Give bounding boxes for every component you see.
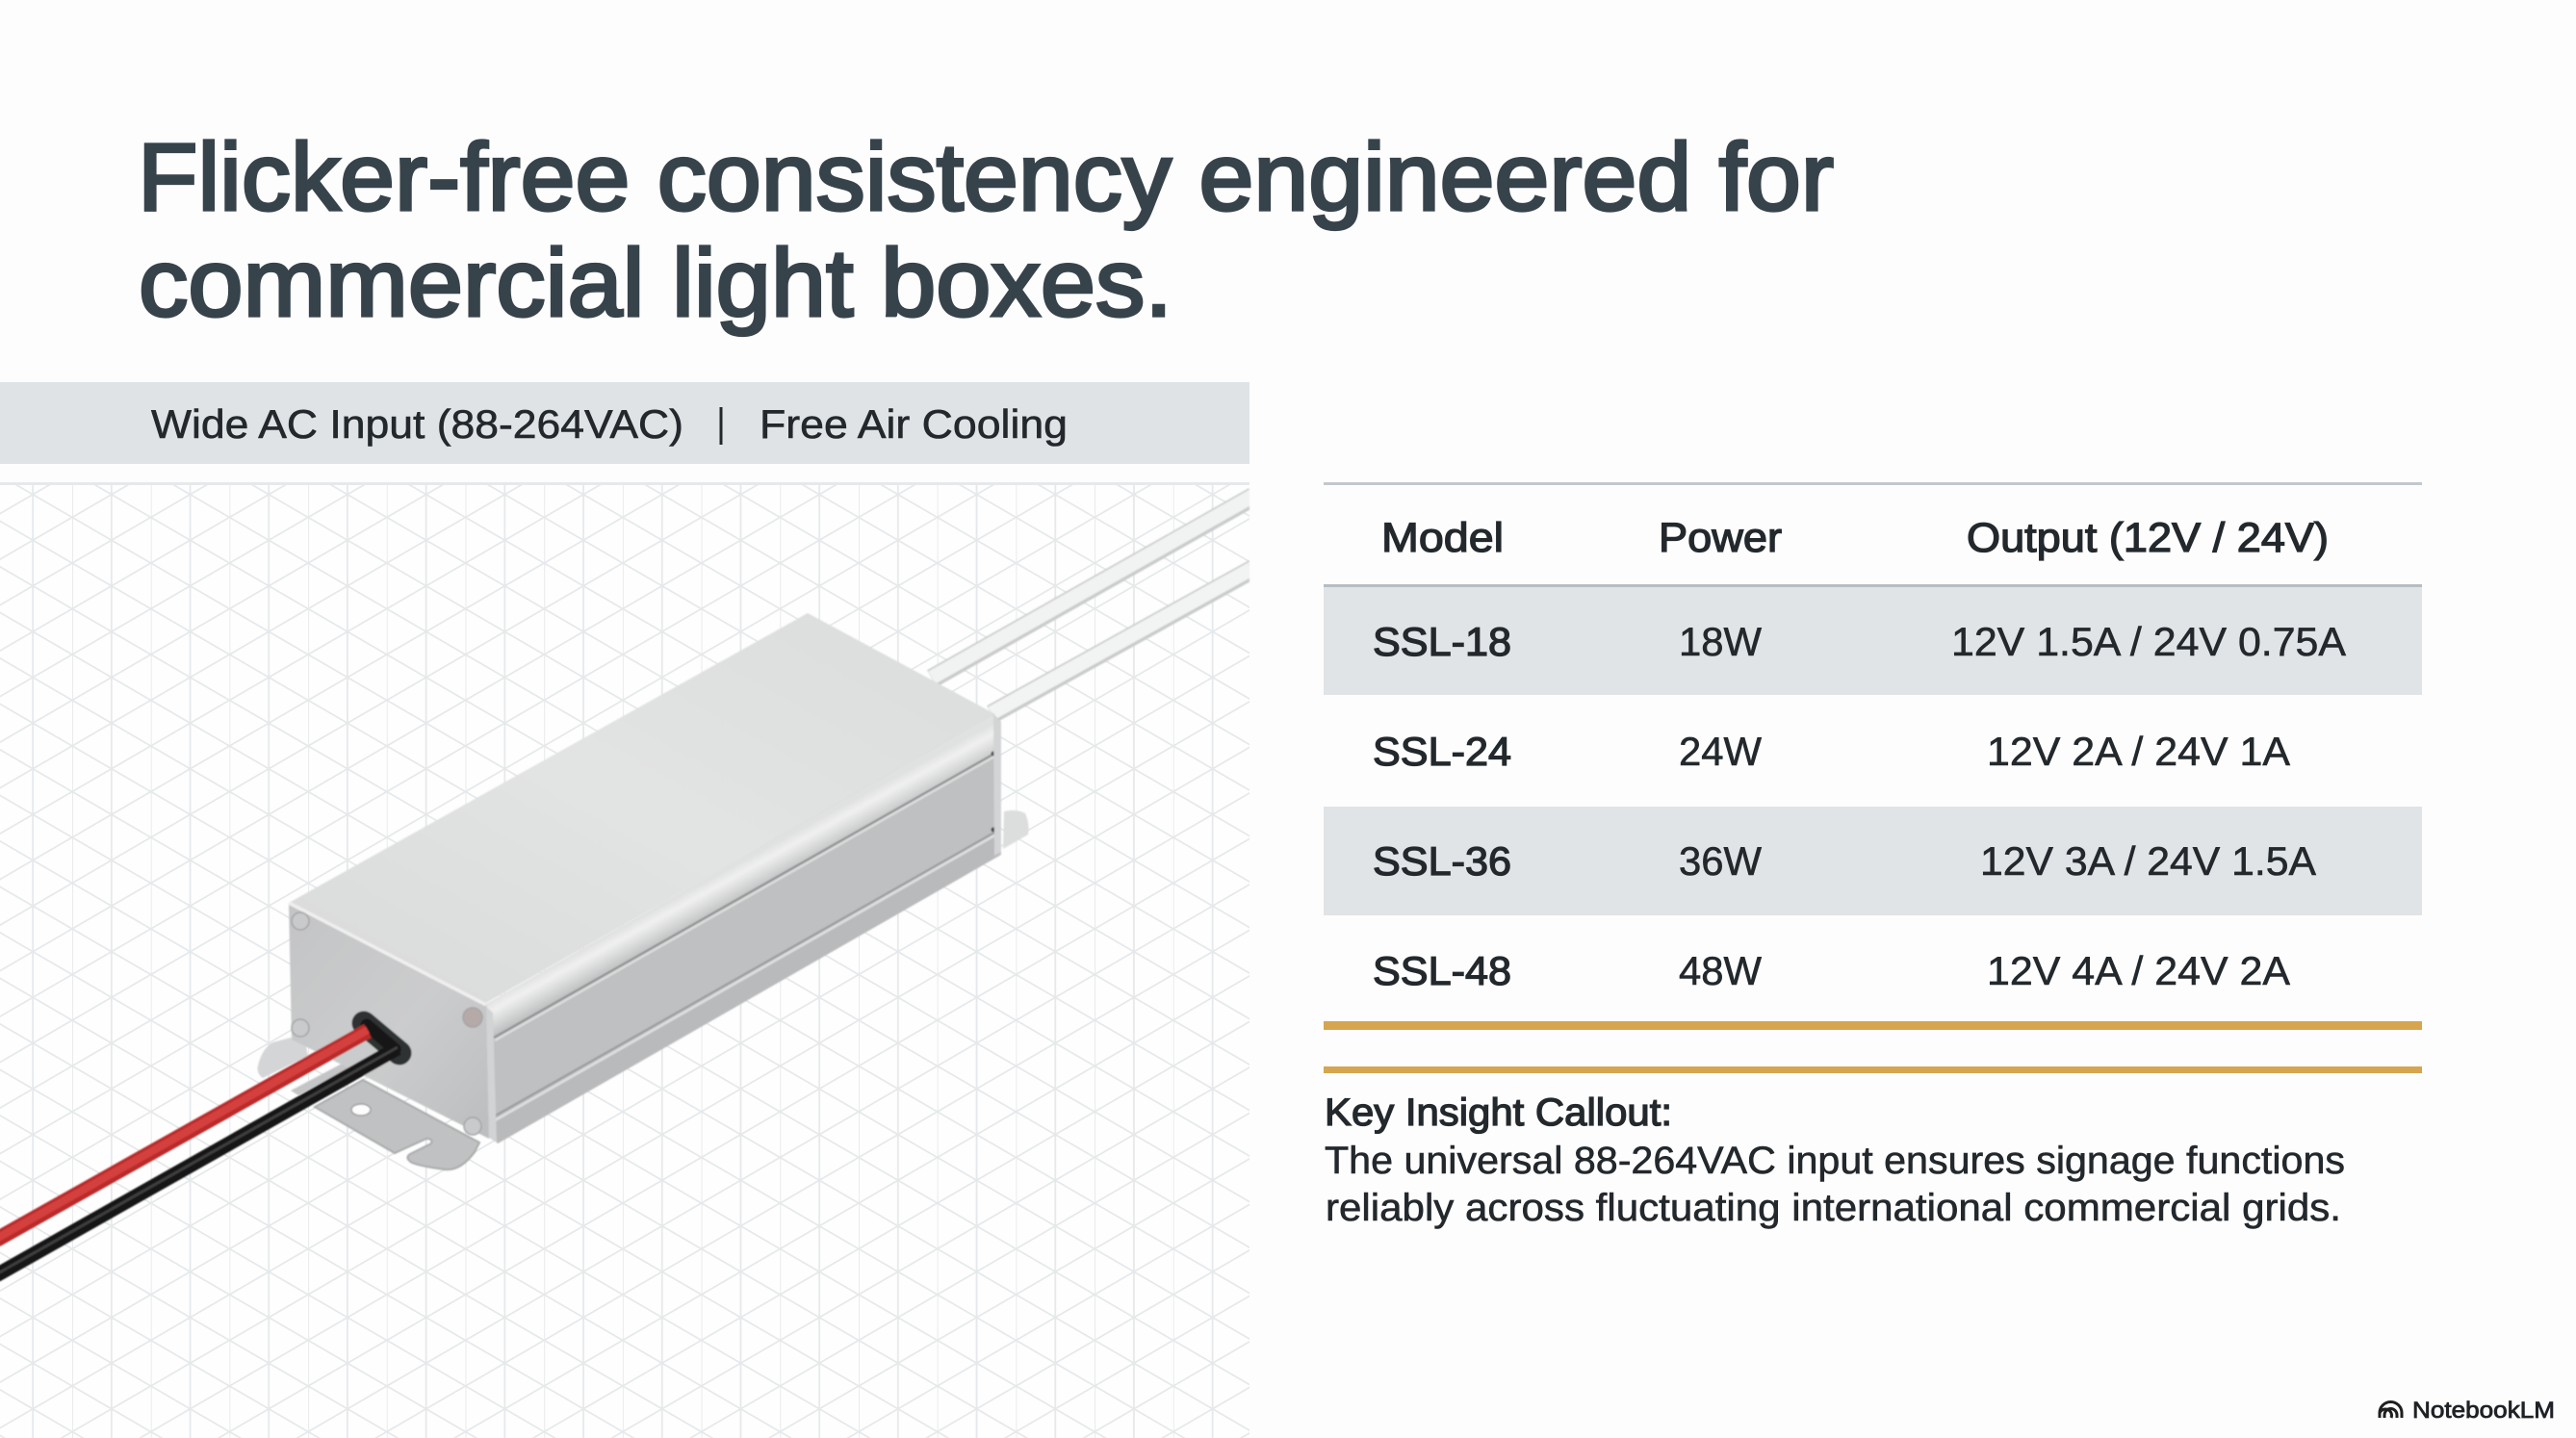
red output wire: [0, 1030, 368, 1240]
power supply device: [0, 496, 1253, 1275]
row: SSL-36: SSL-36: [1373, 838, 1511, 884]
separator: [720, 407, 722, 445]
white input wires: [932, 496, 1253, 714]
front top edge highlight: [289, 903, 486, 1005]
bevelled top edge highlight: [486, 714, 995, 1040]
table header: [1381, 515, 2329, 561]
row: SSL-48: 48W: [1679, 948, 1762, 993]
row: SSL-18: SSL-18: [1373, 619, 1511, 664]
feature: wide AC input: Wide AC Input (88-264VAC): [151, 401, 683, 447]
icon: notebook arcs: [2380, 1401, 2402, 1418]
callout heading: Key Insight Callout:: [1325, 1091, 1672, 1134]
mounting flanges: [258, 810, 1029, 1169]
row: SSL-36: [1324, 807, 2422, 915]
table bottom gold rule: [1324, 1021, 2422, 1030]
front face: [289, 905, 489, 1139]
panel top edge: [0, 482, 1249, 485]
row: SSL-18: 18W: [1679, 619, 1762, 664]
row: SSL-36: 12V 3A / 24V 1.5A: [1980, 838, 2316, 884]
panel: product illustration: [0, 482, 1253, 1438]
title line 1: Flicker-free consistency engineered for: [138, 123, 1834, 230]
front face screws: [292, 912, 482, 1135]
rubber grommet: [364, 1023, 399, 1053]
callout gold rule: [1324, 1066, 2422, 1073]
row: SSL-24: [1373, 729, 2290, 774]
table top rule: [1324, 482, 2422, 485]
callout body line 1: The universal 88-264VAC input ensures signage functions: [1325, 1140, 2345, 1182]
side grooves: [494, 754, 994, 1120]
wordmark: NotebookLM: [2412, 1398, 2555, 1424]
lower side strip: [494, 835, 999, 1143]
table header: Power: [1659, 515, 1782, 561]
row: SSL-24: 12V 2A / 24V 1A: [1987, 729, 2290, 774]
row: SSL-36: 36W: [1679, 838, 1762, 884]
bar background: [0, 382, 1249, 464]
title line 2: commercial light boxes.: [139, 229, 1172, 336]
feature: free air cooling: Free Air Cooling: [760, 401, 1068, 447]
side end strips: [993, 715, 1001, 856]
NotebookLM watermark: [2380, 1398, 2555, 1424]
panel background: [0, 484, 1249, 1438]
row: SSL-24: 24W: [1679, 729, 1762, 774]
row: SSL-18: [1324, 587, 2422, 695]
top face: [289, 613, 995, 1004]
table header: Output (12V / 24V): [1967, 515, 2329, 561]
title: [138, 123, 1834, 336]
side face: [486, 714, 1001, 1143]
black output wire: [0, 1047, 398, 1275]
feature bar: [0, 382, 1249, 464]
row: SSL-18: 12V 1.5A / 24V 0.75A: [1951, 619, 2346, 664]
row: SSL-24: SSL-24: [1373, 729, 1511, 774]
panel: specification table: [1324, 482, 2422, 1030]
header rule: [1324, 584, 2422, 587]
table header: Model: [1381, 515, 1504, 561]
row: SSL-48: [1373, 948, 2290, 993]
callout: key insight: [1324, 1066, 2422, 1229]
row: SSL-48: SSL-48: [1373, 948, 1511, 993]
callout body line 2: reliably across fluctuating international commercial grids.: [1326, 1187, 2341, 1229]
row: SSL-48: 12V 4A / 24V 2A: [1987, 948, 2290, 993]
isometric grid: [0, 485, 1249, 1438]
groove end notches: [992, 751, 995, 757]
